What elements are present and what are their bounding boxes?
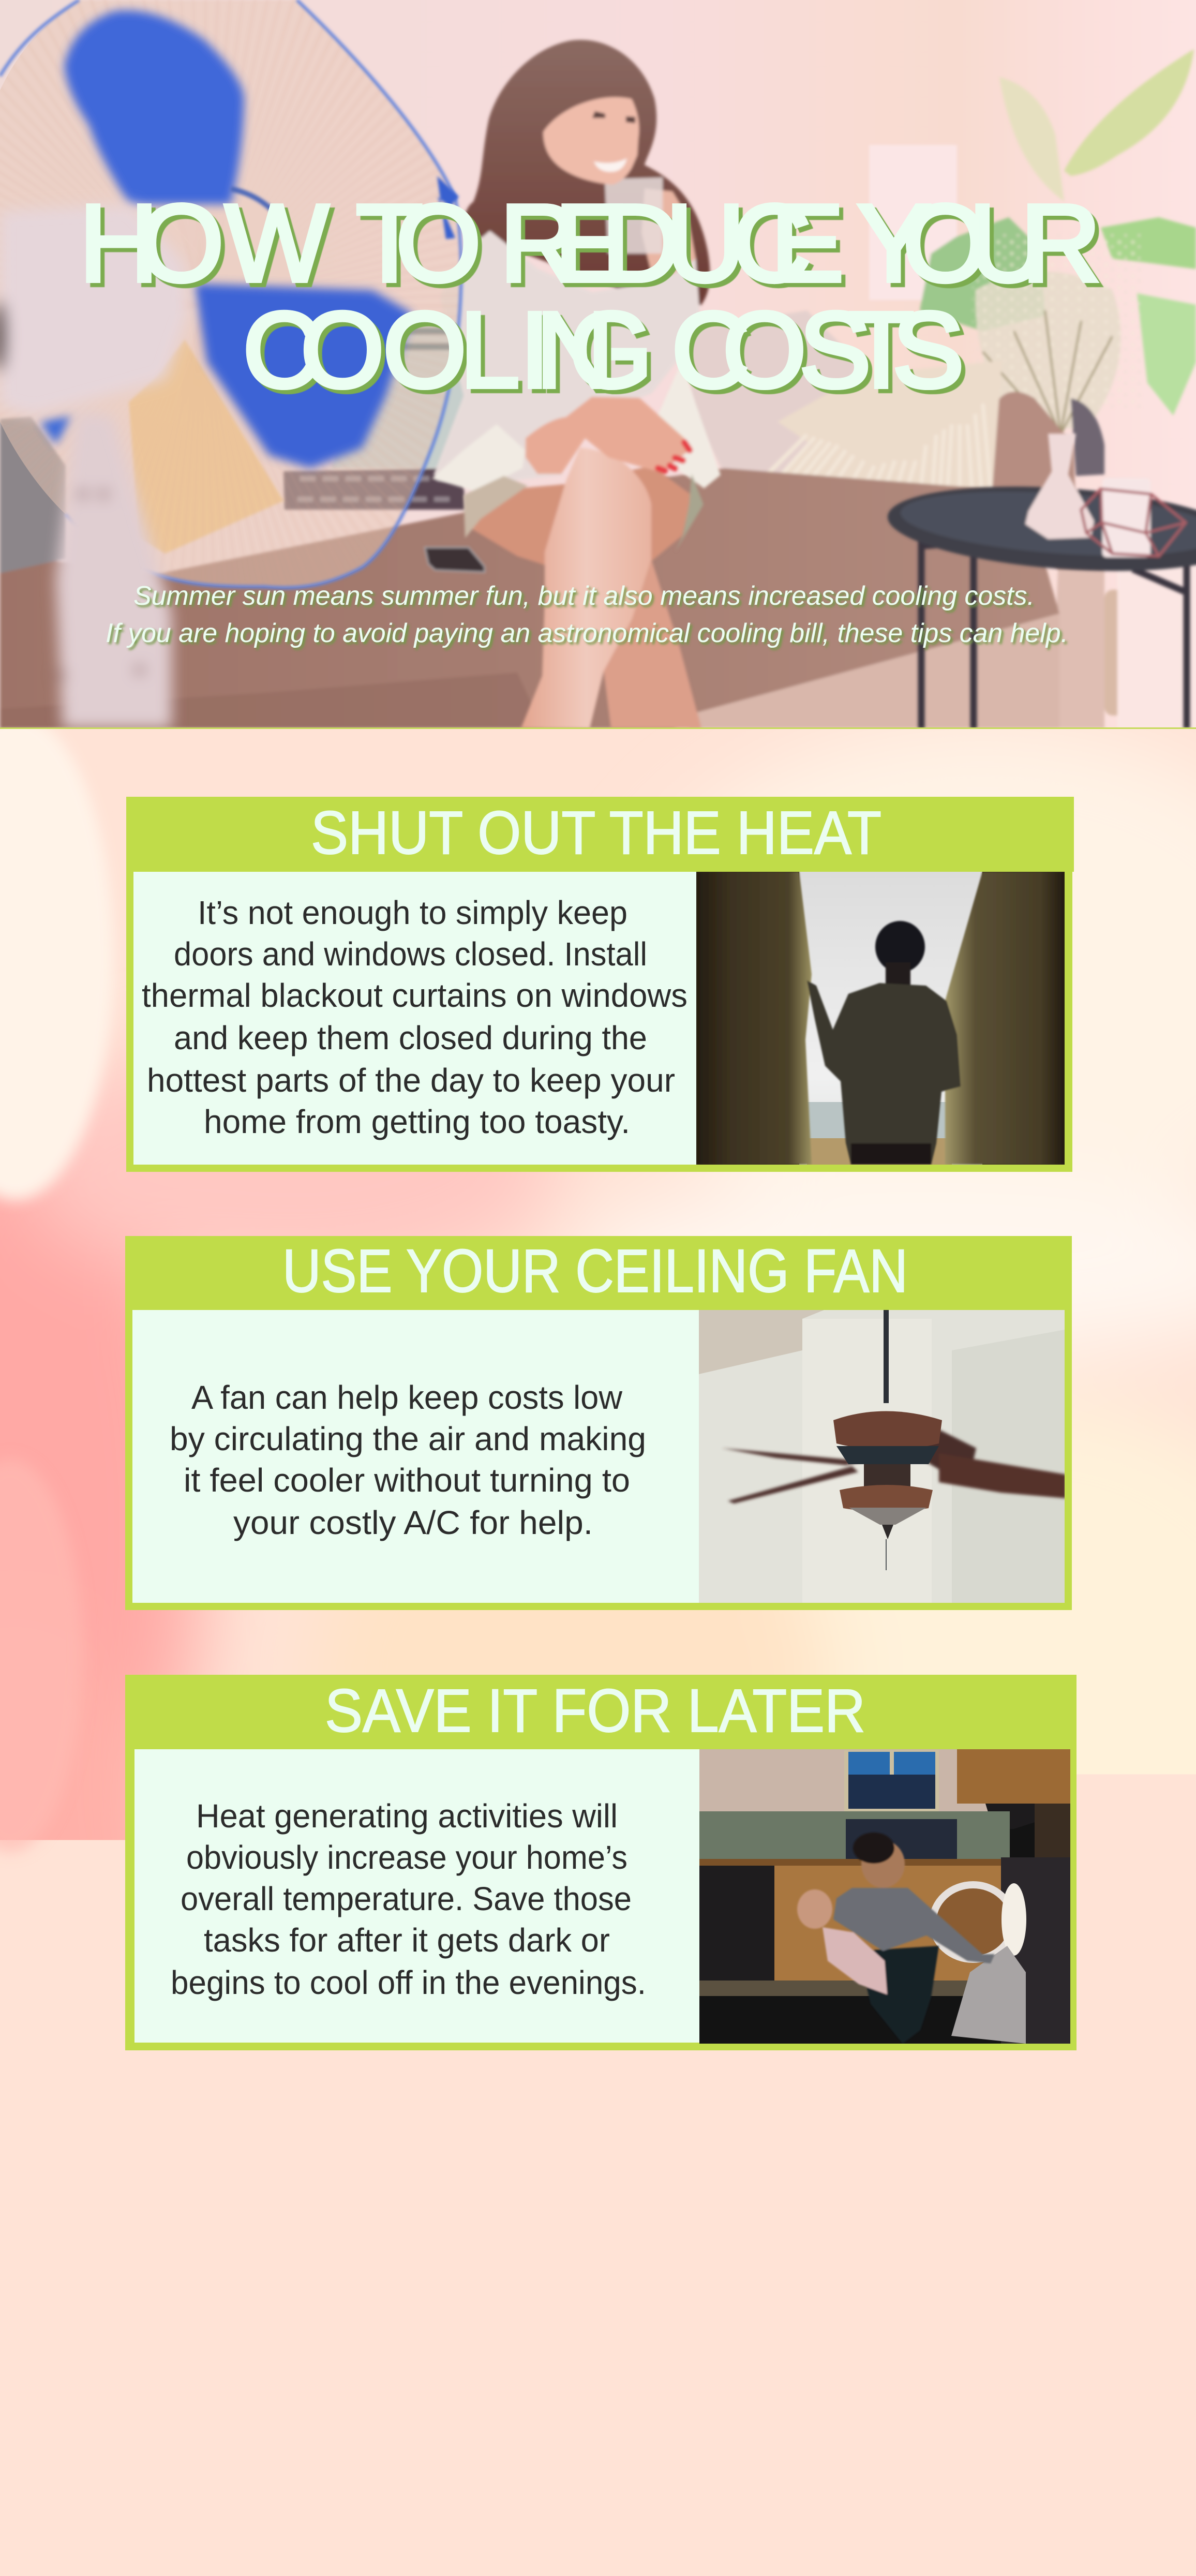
- body text: it feel cooler without turning to: [184, 1462, 630, 1499]
- panel: save it for later: [125, 1675, 1077, 2050]
- front leg: [521, 448, 651, 728]
- back thigh: [471, 466, 692, 579]
- panel: optimize your cooling systems: [125, 2112, 1074, 2488]
- wire ornament: [1081, 489, 1186, 556]
- footer credit: ©RISMEDIA: [279, 2521, 415, 2543]
- body text: [147, 2235, 684, 2438]
- back leg: [604, 559, 701, 728]
- main title: COOLING COSTS: [243, 290, 964, 410]
- thermostat screen: 104: [881, 2266, 900, 2281]
- orange cushion: [129, 339, 283, 554]
- intro text: [106, 581, 1068, 648]
- dial: [880, 2316, 960, 2391]
- body text: doors and windows closed. Install: [174, 935, 647, 973]
- thermostat screen: F°: [943, 2223, 953, 2234]
- body text: anticipation of your arrival home.: [173, 2401, 650, 2438]
- heading: OPTIMIZE YOUR COOLING SYSTEMS: [133, 2116, 1062, 2181]
- body text: tasks for after it gets dark or: [204, 1922, 610, 1959]
- intro text: Summer sun means summer fun, but it also means increased cooling costs.: [133, 581, 1035, 611]
- right curtain: [945, 872, 1065, 1165]
- fan stand and motor: [0, 204, 188, 728]
- heading: SAVE IT FOR LATER: [325, 1677, 865, 1745]
- wall: [0, 0, 1196, 728]
- page background: soft pink and teal bokeh: [0, 714, 1196, 2576]
- side table with vase and candle: [885, 434, 1196, 728]
- left patterned cushion: [0, 416, 66, 573]
- sofa armrest: [992, 392, 1104, 728]
- hero bottom rule: [0, 727, 1196, 729]
- body text: rest at a higher temperature when: [163, 2318, 660, 2355]
- body text: your costly A/C for help.: [233, 1504, 593, 1541]
- fan blades: [40, 10, 412, 468]
- body text: [170, 1379, 646, 1541]
- body text: by circulating the air and making: [170, 1420, 646, 1457]
- thermostat screen: 66: [889, 2218, 939, 2268]
- photo: thermostat: [698, 2186, 1067, 2480]
- fan hub ring and tassel: [231, 176, 459, 285]
- body text: thermal blackout curtains on windows: [142, 977, 687, 1014]
- body text: Heat generating activities will: [196, 1797, 618, 1835]
- glass and raised hand: [641, 188, 696, 274]
- photo: laundry in kitchen: [699, 1749, 1070, 2044]
- body text: you’re away and slowly cool it in: [175, 2359, 647, 2396]
- basket: [1104, 590, 1134, 716]
- body text: hottest parts of the day to keep your: [147, 1062, 675, 1099]
- washer door: [933, 1885, 1013, 1959]
- fan ring: [0, 0, 461, 588]
- blanket: [751, 361, 1002, 514]
- intro text: If you are hoping to avoid paying an astronomical cooling bill, these tips can help.: [106, 618, 1068, 648]
- silhouette: [875, 921, 925, 973]
- body text: and keep them closed during the: [174, 1019, 647, 1056]
- main title: HOW TO REDUCE YOUR: [79, 182, 1101, 304]
- body text: begins to cool off in the evenings.: [171, 1964, 646, 2001]
- aztec cushion: [331, 313, 479, 468]
- body text: overall temperature. Save those: [181, 1880, 632, 1917]
- thermostat screen: ECO: [934, 2267, 954, 2281]
- heading: USE YOUR CEILING FAN: [282, 1237, 908, 1305]
- body text: It’s not enough to simply keep: [198, 894, 627, 931]
- footer rights: ALL RIGHTS RESERVED: [622, 2521, 908, 2543]
- woman and baby: [797, 1833, 995, 2044]
- panel: shut out the heat: [126, 797, 1074, 1172]
- body text: obviously increase your home’s: [186, 1839, 627, 1876]
- heading: SHUT OUT THE HEAT: [311, 799, 881, 867]
- body text: cooling schedule. Allow your home to: [147, 2276, 684, 2313]
- fan cage mesh: [0, 0, 476, 590]
- woman: [425, 40, 721, 728]
- panel: use your ceiling fan: [125, 1236, 1072, 1610]
- hand: [698, 2320, 954, 2480]
- laundry: [951, 1946, 1026, 2044]
- body text: A fan can help keep costs low: [191, 1379, 623, 1416]
- hair: [465, 40, 710, 305]
- body text: Change filters regularly and set a: [172, 2235, 650, 2272]
- thermostat screen: OUTDOOR: [903, 2274, 924, 2279]
- body text: [171, 1797, 646, 2001]
- white pillow: [684, 310, 859, 473]
- body text: [142, 894, 687, 1140]
- face: [543, 97, 639, 185]
- photo: ceiling fan: [699, 1310, 1066, 1603]
- left curtain: [696, 872, 812, 1165]
- body text: home from getting too toasty.: [204, 1103, 630, 1140]
- plant leaves: [920, 49, 1196, 435]
- phone: [425, 547, 485, 572]
- main title: [79, 182, 1101, 410]
- thermostat screen: [866, 2213, 975, 2304]
- shorts: [464, 476, 528, 538]
- sweater: [433, 231, 701, 485]
- photo: person at curtains: [696, 872, 1065, 1165]
- sofa seat: [0, 468, 1059, 728]
- resting hand: [526, 397, 690, 474]
- hero photo: woman on sofa beside a fan: [0, 0, 1196, 728]
- room background and sofa: [0, 49, 1196, 728]
